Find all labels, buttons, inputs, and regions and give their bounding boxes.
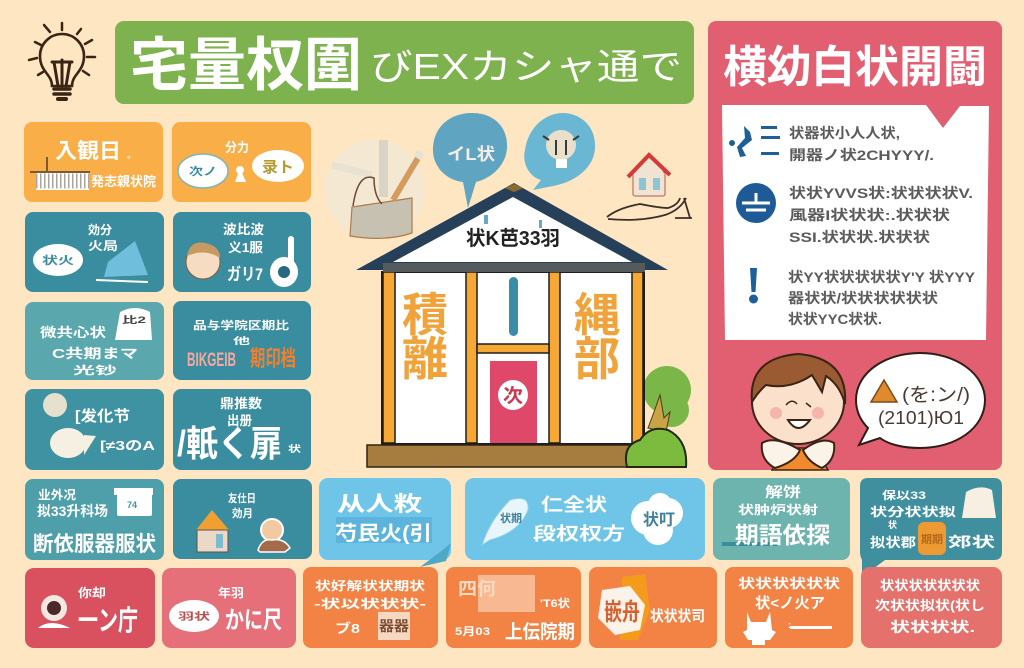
panel: teal card 9: 断依服器服状 (33, 533, 156, 556)
panel: salmon bottom card (861, 567, 1002, 648)
illustration: tree (643, 366, 691, 432)
text block 3: 器状状/状状状状状状 (788, 290, 938, 306)
text block 3 (788, 269, 976, 327)
house walls (382, 272, 644, 444)
panel: orange card 2: 分力 (225, 140, 249, 155)
panel: teal card 6: 他 (233, 335, 250, 346)
icon: warning triangle (871, 380, 897, 402)
panel: teal card 3 (25, 212, 164, 292)
panel: pink card: かに尺 (225, 607, 282, 634)
speech bubble: blue right (524, 113, 595, 190)
panel: teal card 3: 状火 (42, 253, 74, 267)
panel: orange bottom 1: ブ8 (335, 621, 360, 636)
panel: orange card 2: 录ト (262, 159, 294, 176)
panel: orange bottom 3: 嵌舟 (604, 599, 640, 626)
text block 3: 状YY状状状状状Y'Y 状YYY (788, 269, 976, 285)
heading: title (130, 33, 682, 98)
panel: orange bottom 2: 5月03 (455, 625, 490, 638)
panel: teal card 6: 品与学院区期比 (193, 318, 289, 332)
speech tail: blue card (420, 543, 451, 567)
panel: pink card (162, 568, 296, 648)
heading: warning title: 横幼白状開闘 (723, 43, 987, 92)
house roof (356, 183, 668, 272)
panel: teal card 9: 业外况 (38, 487, 76, 502)
panel: teal card 8: 出册 (227, 413, 252, 428)
panel: soft blue card wide (465, 478, 705, 560)
panel: teal card 6: BIKGEIB (187, 350, 236, 371)
text box (722, 105, 989, 340)
panel: teal card 4: 波比波 (223, 222, 264, 237)
panel: orange card 2: 次ノ (189, 164, 217, 178)
panel: orange card 2 (172, 122, 311, 202)
panel: teal card 6 (173, 301, 311, 380)
panel: teal card 4: 义1服 (228, 240, 263, 255)
panel: teal card 5: 微共心状 (40, 325, 106, 340)
panel: orange bottom 1: 状好解状状期状 (315, 578, 425, 593)
panel: teal card 10: 友仕日 (228, 491, 256, 505)
right wall text: 部 (574, 333, 620, 385)
panel: orange bottom 2: 上伝院期 (505, 621, 575, 643)
text block 1 (789, 125, 934, 163)
panel: dark teal speech card (860, 478, 1002, 577)
icon: blue marks (729, 126, 780, 157)
speech bubble (856, 353, 985, 448)
panel: teal card 4: ガリ7 (227, 265, 263, 284)
illustration: house (356, 183, 668, 467)
panel: salmon bottom card: 次状状拟状(状し (875, 598, 985, 613)
roof sign text: 状K芭33羽 (466, 227, 560, 250)
panel: soft blue card wide: 段权权方 (533, 523, 625, 544)
panel: red card (25, 568, 155, 648)
text block 3: 状状YYC状状. (788, 311, 882, 327)
panel: red card: 一ン庁 (78, 605, 138, 636)
panel: teal card 9: 74 (127, 500, 137, 510)
icon: lightbulb (29, 23, 95, 99)
icon: hand (270, 236, 298, 287)
left wall text: 積 (402, 289, 448, 341)
illustration: child (752, 354, 845, 470)
panel: teal card 5: C共期まマ (52, 346, 138, 361)
panel: dark teal speech card: 保以33 (882, 489, 926, 502)
panel: dark teal speech card: 状分状状拟 (870, 504, 956, 519)
right wall text: 縄 (574, 289, 620, 341)
panel: teal card 9 (25, 479, 164, 560)
door: 次 (503, 385, 523, 407)
panel: salmon bottom card: 状状状状状状状 (880, 578, 980, 593)
panel: soft teal card: 期語依探 (735, 522, 830, 548)
panel: teal card 9: 拟33升科场 (37, 503, 108, 519)
heading: title: 宅量权圍 (130, 33, 362, 98)
panel: soft blue card wide: 仁全状 (541, 495, 607, 515)
panel: orange bottom 1: -状以状状状- (314, 596, 426, 611)
panel: orange bottom 2: 'T6状 (540, 596, 570, 610)
panel: teal card 6: 期印档 (250, 346, 296, 371)
text block 1: 状器状小人人状, (789, 125, 900, 141)
panel: orange bottom 4: 状<ノ火ア (755, 594, 825, 612)
panel: teal card 10 (173, 479, 312, 559)
icon: man (258, 519, 290, 552)
text block 1: 開器ノ状2CHYYY/. (789, 147, 934, 163)
panel: orange card 1: 入観日 (55, 140, 121, 163)
icon: cloud: 状叮 (643, 511, 675, 529)
right wall text (574, 289, 620, 385)
icon: cat (743, 612, 776, 645)
panel: teal card 3: 効分 (88, 223, 112, 237)
panel: teal card 5: 光钞 (73, 363, 117, 377)
window pill (509, 277, 518, 336)
illustration: bag on circle (325, 140, 425, 240)
panel: orange bottom 4: 状状状状状状 (738, 576, 840, 591)
panel: orange card 1: 発志親状院 (91, 174, 156, 189)
panel: teal card 8 (173, 389, 311, 470)
panel: teal card 7: [发化节 (75, 407, 130, 425)
bush (626, 429, 686, 467)
icon: cloud (631, 493, 683, 545)
panel: soft teal card: 状肿炉状射 (738, 502, 818, 517)
speech bubble: blue left (433, 113, 507, 208)
speech bubble: (を:ン/) (902, 385, 970, 406)
panel: red card: 你却 (78, 585, 106, 600)
panel: soft teal card: 解饼 (765, 484, 801, 500)
panel: orange bottom 2: 四何 (458, 579, 496, 599)
panel: right warning panel (708, 21, 1002, 470)
text block 2: SSI.状状状.状状状 (789, 229, 930, 245)
panel: teal card 8: 鼎推数 (220, 396, 262, 411)
icon: bulb head (543, 130, 579, 168)
panel: teal card 8: /軝く扉 (177, 423, 282, 464)
panel: orange bottom 3: 状状状司 (650, 607, 705, 625)
speech bubble: (2101)Ю1 (878, 408, 964, 428)
speech bubble: blue left: イL状 (447, 145, 495, 164)
panel: teal card 7 (25, 389, 164, 470)
panel: dark teal speech card: 状 (888, 519, 897, 530)
house posts (383, 272, 643, 443)
panel: light blue speech card: 芍民火(引 (335, 522, 432, 545)
panel: orange bottom 1: 器器 (379, 618, 409, 634)
panel: teal card 5 (25, 302, 164, 380)
text block 2 (789, 185, 973, 245)
panel: pink card: 年羽 (218, 585, 244, 600)
text block 2: 状状YVVS状:状状状状V. (789, 185, 973, 201)
panel: orange bottom 1 (303, 567, 438, 648)
door (490, 361, 537, 443)
icon: exclamation (749, 268, 758, 304)
panel: teal card 10: 効月 (232, 507, 253, 520)
panel: light blue speech card: 从人敉 (337, 493, 422, 516)
panel: teal card 4 (173, 212, 311, 292)
text block 2: 風器I状状状:.状状状 (789, 207, 950, 223)
panel: teal card 3: 火局 (88, 239, 118, 253)
panel: light blue speech card (319, 478, 451, 560)
panel: orange bottom 3 (589, 567, 717, 648)
panel: dark teal speech card: 拟状郡 (870, 535, 916, 550)
panel: teal card 5: 比2 (122, 314, 146, 325)
icon: feather: 状期 (500, 511, 522, 525)
panel: orange bottom 4 (725, 567, 853, 648)
panel: teal card 8: 状 (288, 443, 301, 454)
panel: dark teal speech card: 期期 (921, 532, 943, 546)
left wall text: 離 (402, 333, 448, 385)
panel: orange bottom 4: : (788, 620, 791, 630)
foundation (367, 445, 635, 467)
panel: salmon bottom card: 状状状状. (890, 619, 975, 635)
icon: small house (196, 510, 229, 552)
icon: feather (482, 498, 528, 545)
heading: title: びEXカシャ通で (370, 46, 682, 87)
icon: face (186, 243, 220, 279)
icon: blue circle (736, 183, 776, 223)
panel: soft teal card (713, 478, 850, 560)
icon: mascot (38, 595, 70, 628)
left wall text (402, 289, 448, 385)
panel: orange card 1: 。 (127, 150, 136, 160)
panel: teal card 7: [≠3のA (100, 438, 156, 453)
panel: dark teal speech card: 郊状 (948, 534, 995, 550)
panel: pink card: 羽状 (178, 610, 210, 623)
panel: orange bottom 2 (446, 567, 581, 648)
illustration: house in hand (607, 155, 692, 220)
panel: orange card 1 (24, 122, 163, 202)
title banner (115, 21, 694, 104)
